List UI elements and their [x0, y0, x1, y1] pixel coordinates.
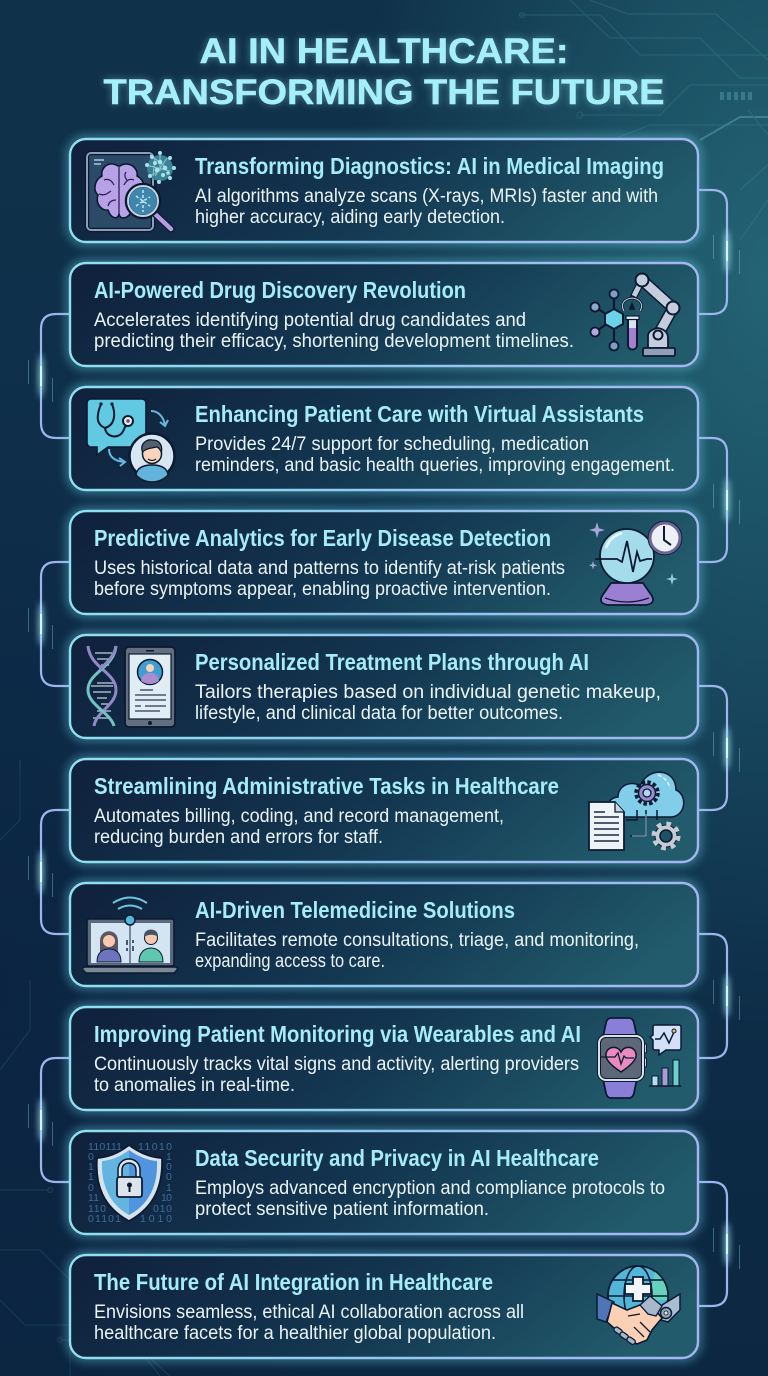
body 2: Accelerates identifying potential drug candidates and: [94, 310, 526, 331]
body 8: Continuously tracks vital signs and activity, alerting providers: [94, 1054, 579, 1075]
heading 5: Personalized Treatment Plans through AI: [195, 649, 589, 675]
icon: shield with lock over binary: 0: [166, 1171, 172, 1183]
icon: molecule and robot arm: [590, 274, 680, 356]
card 7: telemedicine: [70, 883, 698, 986]
heading 6: Streamlining Administrative Tasks in Healthcare: [94, 773, 559, 799]
body 3: Provides 24/7 support for scheduling, medication: [195, 434, 589, 455]
body 1: higher accuracy, aiding early detection.: [195, 207, 505, 228]
body 5: [195, 682, 661, 724]
heading 9: Data Security and Privacy in AI Healthcare: [195, 1145, 599, 1171]
icon: crystal ball with clock: [589, 522, 682, 605]
icon: shield with lock over binary: 1: [166, 1151, 172, 1163]
body 8: [94, 1054, 579, 1096]
card 5: personalized treatment: [70, 635, 698, 738]
body 9: [195, 1178, 665, 1220]
card 1: medical imaging: [70, 139, 698, 242]
circuit traces top right: [520, 0, 768, 240]
icon: shield with lock over binary: 0: [88, 1182, 94, 1194]
title: [104, 32, 664, 112]
icon: shield with lock over binary: 01101: [88, 1213, 121, 1225]
heading 8: Improving Patient Monitoring via Wearables and AI: [94, 1021, 581, 1047]
icon: DNA and tablet profile: [88, 646, 175, 727]
card 2: drug discovery: [70, 263, 698, 366]
body 9: protect sensitive patient information.: [195, 1199, 489, 1220]
icon: smartwatch and charts: [599, 1018, 681, 1098]
hash marks top right: [720, 92, 752, 100]
icon: shield with lock over binary: 10: [161, 1192, 172, 1204]
body 5: Tailors therapies based on individual genetic makeup,: [195, 682, 661, 703]
heading 2: AI-Powered Drug Discovery Revolution: [94, 277, 466, 303]
heading 4: Predictive Analytics for Early Disease Detection: [94, 525, 551, 551]
icon: brain scan with magnifier: [87, 151, 176, 230]
icon: handshake under globe: [597, 1266, 680, 1345]
body 5: lifestyle, and clinical data for better outcomes.: [195, 703, 563, 724]
icon: shield with lock over binary: 1: [88, 1171, 94, 1183]
icon: cloud, document and gears: [589, 772, 684, 850]
icon: shield with lock over binary: 1: [166, 1182, 172, 1194]
icon: shield with lock over binary: 1010: [140, 1213, 172, 1225]
body 8: to anomalies in real-time.: [94, 1075, 295, 1096]
body 10: healthcare facets for a healthier global population.: [94, 1323, 496, 1344]
body 6: reducing burden and errors for staff.: [94, 827, 383, 848]
icon: shield with lock over binary: 11010: [138, 1141, 172, 1153]
body 1: AI algorithms analyze scans (X-rays, MRIs) faster and with: [195, 186, 658, 207]
body 4: before symptoms appear, enabling proactive intervention.: [94, 579, 551, 600]
card 3: virtual assistants: [70, 387, 698, 490]
heading 10: The Future of AI Integration in Healthcare: [94, 1269, 493, 1295]
card 9: data security: [70, 1131, 698, 1234]
body 1: [195, 186, 658, 228]
icon: laptop video call with wifi: [83, 898, 177, 973]
title: AI IN HEALTHCARE:: [200, 32, 568, 71]
heading 3: Enhancing Patient Care with Virtual Assistants: [195, 401, 644, 427]
card 10: future integration: [70, 1255, 698, 1358]
circuit traces bottom left: [0, 760, 170, 1376]
title: AI IN HEALTHCARE:: [200, 32, 568, 71]
body 4: [94, 558, 565, 600]
body 2: predicting their efficacy, shortening development timelines.: [94, 331, 574, 352]
body 9: Employs advanced encryption and compliance protocols to: [195, 1178, 665, 1199]
body 2: [94, 310, 574, 352]
body 7: expanding access to care.: [195, 951, 385, 972]
card 4: predictive analytics: [70, 511, 698, 614]
title: TRANSFORMING THE FUTURE: [104, 73, 664, 112]
icon: shield with lock over binary: 1: [88, 1161, 94, 1173]
body 3: reminders, and basic health queries, improving engagement.: [195, 455, 675, 476]
body 10: Envisions seamless, ethical AI collaboration across all: [94, 1302, 524, 1323]
heading 7: AI-Driven Telemedicine Solutions: [195, 897, 515, 923]
icon: shield with lock over binary: 110: [88, 1203, 106, 1215]
body 4: Uses historical data and patterns to identify at-risk patients: [94, 558, 565, 579]
connectors between cards: [28, 190, 740, 1306]
card 6: administrative tasks: [70, 759, 698, 862]
body 7: Facilitates remote consultations, triage, and monitoring,: [195, 930, 639, 951]
icon: shield with lock over binary: 110111: [88, 1141, 122, 1153]
heading 1: Transforming Diagnostics: AI in Medical Imaging: [195, 153, 664, 179]
icon: shield with lock over binary: 0: [88, 1151, 94, 1163]
icon: shield with lock over binary: 010: [153, 1203, 172, 1215]
icon: shield with lock over binary: 0: [166, 1161, 172, 1173]
icon: shield with lock over binary: 11: [88, 1192, 99, 1204]
body 6: Automates billing, coding, and record management,: [94, 806, 504, 827]
icon: chat stethoscope and patient: [87, 399, 174, 482]
body 6: [94, 806, 504, 848]
body 3: [195, 434, 675, 476]
title: TRANSFORMING THE FUTURE: [104, 73, 664, 112]
icon: shield with lock over binary: [88, 1141, 172, 1225]
body 7: [195, 930, 639, 972]
card 8: wearables: [70, 1007, 698, 1110]
body 10: [94, 1302, 524, 1344]
